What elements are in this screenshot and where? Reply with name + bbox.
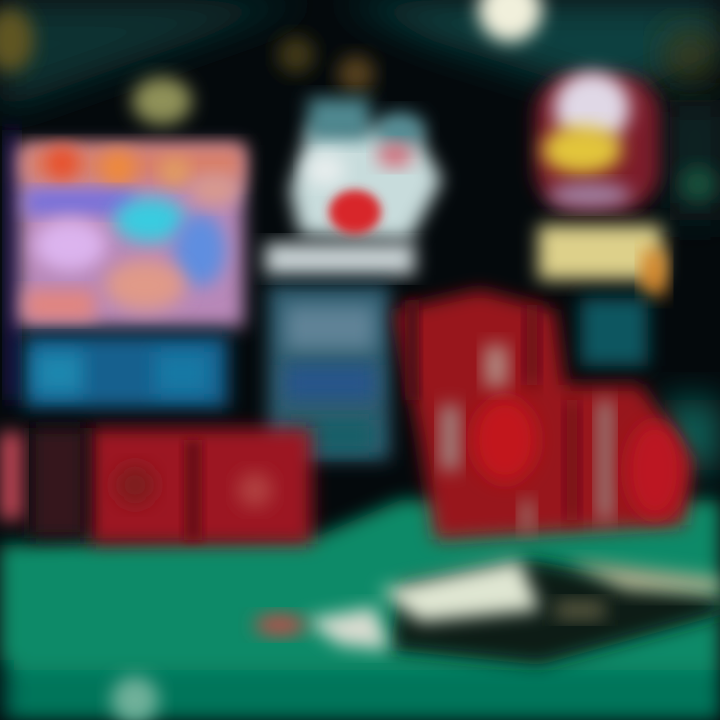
panel: centre slot machine top [265,98,442,275]
panel: left video screen [6,130,244,400]
panel: centre slot machine body [268,285,390,460]
chart element: left red chip stacks [0,428,312,544]
panel: left machine base [24,336,228,408]
illustration: scattered cards on table [254,560,720,665]
icon: red centre emblem [329,190,381,234]
chart element: right red chip pile [395,290,692,540]
background: dark room [0,0,720,490]
background: green felt table [0,500,720,720]
panel: right slot machine [535,72,666,366]
